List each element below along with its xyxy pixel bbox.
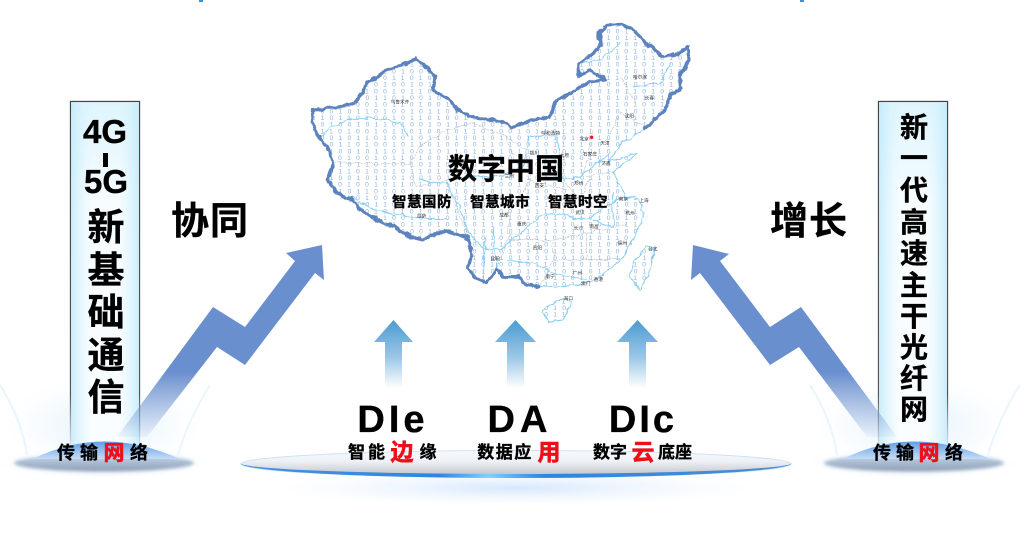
- pedestal: right transmission network: 输: [896, 442, 914, 463]
- province borders: [333, 77, 647, 287]
- binary digit texture: 1010010110100101101001011010010110100101101: [312, 282, 696, 289]
- binary digit texture: 0110100101101001011010010110100101101001011: [312, 298, 696, 305]
- pillar: next-generation backbone fiber network: 新: [900, 112, 928, 143]
- binary digit texture: 0101101001011010010110100101101001011010010: [312, 88, 696, 95]
- city labels: 海口: [564, 295, 573, 302]
- city labels: 北京: [579, 135, 589, 142]
- rivers and coast: [322, 43, 670, 322]
- label: DIc digital cloud base: [593, 399, 692, 465]
- map subtitle: smart space-time: 智慧时空: [548, 193, 608, 211]
- top edge fragment left: [199, 0, 203, 2]
- pillar: 4G/5G new infrastructure communications: [70, 102, 140, 446]
- binary digit texture: 1001011010010110100101101001011010010110100: [312, 188, 696, 195]
- binary digit texture: 0110100101101001011010010110100101101001011: [312, 128, 696, 135]
- binary digit texture: 0110100101101001011010010110100101101001011: [312, 48, 696, 55]
- city labels: 南京: [619, 195, 628, 202]
- city labels: 广州: [573, 270, 582, 277]
- binary digit texture: 0101101001011010010110100101101001011010010: [312, 142, 696, 149]
- binary digit texture: 0101101001011010010110100101101001011010010: [312, 248, 696, 255]
- city labels: 郑州: [574, 180, 584, 187]
- pillar: next-generation backbone fiber network: 速: [900, 238, 928, 269]
- glow: right pedestal light: [810, 377, 1020, 473]
- label: DIe intelligent edge: 缘: [420, 443, 436, 462]
- label: DIc digital cloud base: 云: [632, 439, 654, 465]
- pedestal: right transmission network: [808, 442, 1020, 479]
- pillar: 4G/5G new infrastructure communications: 通: [88, 335, 124, 376]
- binary digit texture: 0101101001011010010110100101101001011010010: [312, 195, 696, 202]
- binary digit texture: 1010010110100101101001011010010110100101101: [312, 42, 696, 49]
- pillar: 4G/5G new infrastructure communications: 信: [88, 377, 124, 418]
- binary digit texture: 0110100101101001011010010110100101101001011: [312, 235, 696, 242]
- binary digit texture: 0101101001011010010110100101101001011010010: [312, 35, 696, 42]
- binary digit texture: 0110100101101001011010010110100101101001011: [312, 208, 696, 215]
- glow: left pedestal light: [0, 377, 210, 473]
- city labels: 成都: [499, 212, 509, 219]
- city labels: [391, 73, 658, 302]
- pedestal: right transmission network: 络: [945, 442, 963, 463]
- pedestal: right transmission network: 传: [873, 443, 891, 463]
- city labels: 香港: [594, 276, 603, 283]
- city labels: 乌鲁木齐: [391, 98, 410, 105]
- pillar: 4G/5G new infrastructure communications: 新: [88, 207, 124, 248]
- binary digit texture: 1010010110100101101001011010010110100101101: [312, 95, 696, 102]
- pedestal: left transmission network: 输: [80, 442, 98, 463]
- city labels: 呼和浩特: [541, 130, 560, 137]
- thick land border: [312, 24, 688, 287]
- city labels: 太原: [560, 152, 569, 159]
- city labels: 兰州: [505, 172, 514, 178]
- city labels: 杭州: [625, 210, 635, 217]
- pillar: 4G/5G new infrastructure communications: 4G: [83, 113, 127, 150]
- city labels: 天津: [600, 140, 610, 147]
- binary digit texture: 0101101001011010010110100101101001011010010: [312, 312, 696, 319]
- binary digit texture: 0110100101101001011010010110100101101001011: [312, 262, 696, 269]
- arrow: up to cloud: [617, 320, 658, 388]
- city labels: 长沙: [574, 225, 583, 232]
- binary digit texture: 1001011010010110100101101001011010010110100: [312, 162, 696, 169]
- city labels: 西安: [535, 182, 544, 189]
- top edge fragment right: [800, 0, 804, 2]
- city labels: 贵阳: [533, 244, 542, 251]
- binary digit texture: 0101101001011010010110100101101001011010010: [312, 62, 696, 69]
- binary digit texture: 0110100101101001011010010110100101101001011: [312, 182, 696, 189]
- city labels: 石家庄: [583, 150, 597, 157]
- city labels: 台北: [648, 246, 658, 253]
- label: DA data application: DA: [488, 399, 552, 441]
- label: DIe intelligent edge: [348, 399, 436, 465]
- binary digit texture: 1001011010010110100101101001011010010110100: [312, 82, 696, 89]
- marker: Beijing: [590, 136, 593, 139]
- pillar: next-generation backbone fiber network: 光: [900, 332, 928, 363]
- binary digit texture: 0101101001011010010110100101101001011010010: [312, 115, 696, 122]
- heading: growth: 增长: [770, 201, 848, 243]
- pillar: 4G/5G new infrastructure communications: 5G: [84, 163, 128, 200]
- heading: synergy: 协同: [171, 201, 249, 243]
- binary digit texture: 1010010110100101101001011010010110100101101: [312, 202, 696, 209]
- pillar: next-generation backbone fiber network: 主: [900, 270, 928, 301]
- label: DA data application: 用: [538, 439, 560, 465]
- binary digit texture: 1001011010010110100101101001011010010110100: [312, 28, 696, 35]
- pedestal: left transmission network: [0, 442, 210, 479]
- binary digit texture: [312, 22, 696, 319]
- binary digit texture: 1001011010010110100101101001011010010110100: [312, 242, 696, 249]
- city labels: 上海: [639, 197, 649, 204]
- city labels: 哈尔滨: [633, 73, 647, 80]
- binary digit texture: 1001011010010110100101101001011010010110100: [312, 215, 696, 222]
- label: DIc digital cloud base: DIc: [609, 399, 677, 441]
- binary digit texture: 1010010110100101101001011010010110100101101: [312, 68, 696, 75]
- pedestal: left transmission network: 传: [57, 443, 75, 463]
- city labels: 澳门: [581, 280, 591, 287]
- binary digit texture: 1010010110100101101001011010010110100101101: [312, 228, 696, 235]
- pedestal: left transmission network: 络: [130, 442, 148, 463]
- arrow: right rising arrow: [691, 245, 897, 437]
- map title: digital China: 数字中国: [448, 153, 564, 186]
- label: DIe intelligent edge: 智能: [348, 442, 388, 462]
- binary digit texture: 1001011010010110100101101001011010010110100: [312, 135, 696, 142]
- city labels: 拉萨: [417, 212, 427, 219]
- pillar: next-generation backbone fiber network: 纤: [900, 363, 928, 394]
- arrow: up to edge: [374, 320, 413, 388]
- pillar: next-generation backbone fiber network: 代: [900, 175, 928, 206]
- binary digit texture: 0110100101101001011010010110100101101001011: [312, 155, 696, 162]
- map subtitle: smart defence: 智慧国防: [392, 193, 452, 211]
- binary digit texture: 0101101001011010010110100101101001011010010: [312, 275, 696, 282]
- pillar: 4G/5G new infrastructure communications: 基: [88, 250, 124, 291]
- city labels: 银川: [530, 150, 539, 157]
- city labels: 福州: [618, 239, 627, 246]
- label: DA data application: [477, 399, 560, 465]
- city labels: 南昌: [589, 223, 599, 230]
- pillar: next-generation backbone fiber network: 一: [900, 143, 928, 174]
- label: DIe intelligent edge: 边: [390, 439, 414, 465]
- label: DA data application: 数据应: [477, 442, 533, 462]
- label: DIc digital cloud base: 底座: [658, 442, 692, 462]
- city labels: 南宁: [545, 273, 555, 279]
- pillar: next-generation backbone fiber network: 干: [900, 301, 928, 332]
- binary digit texture: 1001011010010110100101101001011010010110100: [312, 305, 696, 312]
- binary digit texture: 1010010110100101101001011010010110100101101: [312, 255, 696, 262]
- map: digital China: [312, 22, 696, 322]
- binary digit texture: 0110100101101001011010010110100101101001011: [312, 22, 696, 29]
- binary digit texture: 0101101001011010010110100101101001011010010: [312, 168, 696, 175]
- binary digit texture: 0110100101101001011010010110100101101001011: [312, 102, 696, 109]
- city labels: 重庆: [517, 220, 527, 227]
- pillar: next-generation backbone fiber network: [878, 102, 948, 446]
- binary digit texture: 0101101001011010010110100101101001011010010: [312, 222, 696, 229]
- binary digit texture: 1001011010010110100101101001011010010110100: [312, 55, 696, 62]
- binary digit texture: 1010010110100101101001011010010110100101101: [312, 148, 696, 155]
- city labels: 济南: [601, 160, 611, 167]
- base platform: [240, 450, 792, 506]
- arrow: left rising arrow: [117, 245, 324, 437]
- binary digit texture: 0110100101101001011010010110100101101001011: [312, 75, 696, 82]
- city labels: 长春: [645, 94, 654, 101]
- pillar: next-generation backbone fiber network: 网: [900, 394, 928, 425]
- pedestal: left transmission network: 网: [104, 442, 124, 465]
- pedestal: right transmission network: 网: [918, 442, 940, 465]
- binary digit texture: 1001011010010110100101101001011010010110100: [312, 268, 696, 275]
- city labels: 武汉: [575, 209, 585, 216]
- binary digit texture: 1001011010010110100101101001011010010110100: [312, 108, 696, 115]
- binary digit texture: 1010010110100101101001011010010110100101101: [312, 122, 696, 129]
- label: DIe intelligent edge: DIe: [357, 399, 429, 441]
- city labels: 沈阳: [625, 112, 634, 119]
- map subtitle: smart city: 智慧城市: [470, 193, 530, 211]
- binary digit texture: 1010010110100101101001011010010110100101101: [312, 175, 696, 182]
- label: DIc digital cloud base: 数字: [593, 442, 627, 462]
- arrow: up to data: [495, 320, 536, 388]
- pillar: next-generation backbone fiber network: 高: [900, 207, 928, 238]
- city labels: 昆明: [490, 257, 500, 263]
- pillar: 4G/5G new infrastructure communications: 础: [88, 292, 124, 333]
